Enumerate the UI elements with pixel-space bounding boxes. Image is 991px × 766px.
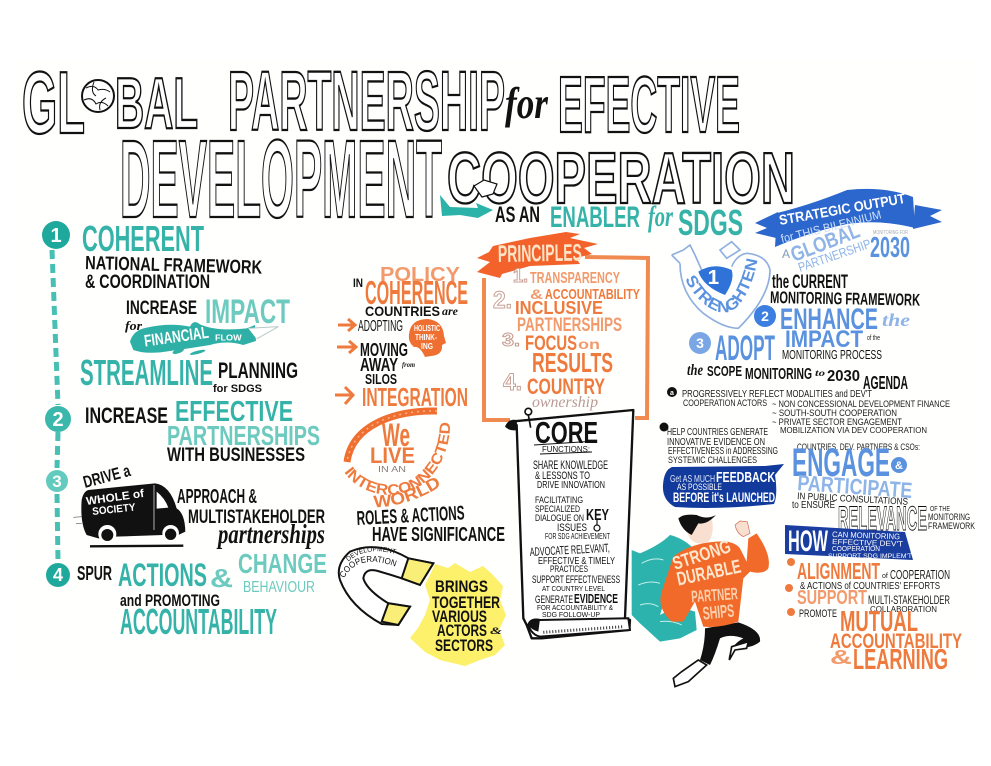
panel: core functions scroll	[505, 408, 633, 638]
icon: head, holistic thinking: THINK-	[415, 333, 437, 342]
how bullets	[785, 558, 962, 676]
speech bubble: feedback: BEFORE it's LAUNCHED	[673, 489, 775, 505]
timeline: numbered dashed line: 2	[52, 409, 64, 431]
principle 1: TRANSPARENCY	[530, 270, 620, 287]
bullet b: help countries: EFFECTIVENESS in ADDRESSING	[668, 446, 778, 457]
step 4: spur actions	[77, 548, 327, 642]
point 3: adopt the scope: 2030	[827, 368, 860, 385]
function 2: facilitating dialogue: FACILITATING	[535, 495, 583, 506]
step 4: spur actions: &	[210, 563, 233, 593]
principle 4: ownership	[532, 394, 598, 411]
how box	[785, 525, 913, 560]
we live in an interconnected world: IN AN	[378, 465, 406, 474]
point 2: enhance the impact: ENHANCE	[780, 303, 878, 336]
subtitle: as an enabler for SDGs: SDGS	[678, 202, 743, 243]
function 2: facilitating dialogue	[535, 495, 610, 541]
how bullets: PROMOTE	[799, 608, 837, 620]
icon: key	[594, 520, 600, 531]
point 3: adopt the scope: 3	[696, 335, 704, 351]
how bullets: of	[882, 573, 888, 580]
timeline: numbered dashed line: 1	[50, 225, 62, 247]
panel: core functions scroll: FUNCTIONS:	[542, 445, 590, 454]
bullet a: progressively reflect modalities: ~ NON CONCESSIONAL DEVELOPMENT FINANCE	[772, 399, 950, 409]
step 3: whole of society van: MULTISTAKEHOLDER	[188, 507, 325, 528]
engage and participate: ENGAGE	[792, 441, 890, 485]
how box: COOPERATION	[832, 544, 880, 553]
function 4: support effectiveness	[532, 574, 620, 593]
principle 2	[493, 287, 622, 336]
panel: middle column, policy coherence: POLICY	[380, 264, 461, 286]
step 1: coherent national framework: & COORDINATION	[85, 272, 210, 293]
legs	[700, 622, 760, 665]
principle 1: ACCOUNTABILITY	[545, 286, 640, 303]
function 1: share knowledge: SHARE KNOWLEDGE	[533, 458, 608, 472]
icon: van: WHOLE of	[85, 488, 145, 508]
arrow	[338, 319, 355, 331]
icon: magnet: COOPERATION	[340, 556, 397, 577]
panel: left column, four steps	[42, 218, 327, 642]
subtitle: as an enabler for SDGs: for	[648, 200, 673, 233]
function 3: advocate: PRACTICES	[550, 564, 588, 575]
step 1: coherent national framework: for	[125, 318, 143, 333]
panel: middle column, policy coherence: are	[442, 304, 459, 318]
how bullets: &	[830, 647, 852, 669]
step 2: effective partnerships: PARTNERSHIPS	[167, 420, 320, 451]
step 3: whole of society van	[73, 461, 325, 549]
function 5: generate evidence: FOR ACCOUNTABILITY &	[537, 605, 613, 612]
function 1: share knowledge: DRIVE INNOVATION	[537, 480, 605, 491]
function 3: advocate: EFFECTIVE & TIMELY	[538, 556, 615, 567]
step 2: effective partnerships	[85, 396, 320, 466]
panel: core functions scroll: CORE	[535, 415, 598, 450]
how bullets: & ACTIONS of COUNTRIES' EFFORTS	[800, 580, 940, 592]
function 5: generate evidence: EVIDENCE	[574, 591, 618, 606]
panel: middle column, policy coherence: ADOPTING	[358, 318, 403, 335]
icon: magnet	[338, 546, 435, 626]
panel: middle column, policy coherence: HAVE SIGNIFICANCE	[372, 524, 505, 546]
icon: handshake	[474, 180, 497, 197]
engage and participate: COUNTRIES, DEV. PARTNERS & CSOs:	[797, 442, 920, 452]
bullet a: progressively reflect modalities: a	[670, 390, 674, 397]
icon: magnet: DEVELOPMENT	[346, 546, 396, 562]
point 3: adopt the scope: the	[687, 362, 703, 379]
step 2: effective partnerships: INCREASE	[85, 403, 168, 428]
icon: heart with hands, strengthen: 1	[708, 266, 719, 289]
timeline: numbered dashed line	[42, 221, 71, 587]
speech bubble: feedback	[663, 464, 784, 508]
bullet a: progressively reflect modalities: COOPERATION ACTORS	[683, 398, 767, 408]
icon: head, holistic thinking	[409, 319, 446, 357]
subtitle: as an enabler for SDGs: AS AN	[495, 202, 540, 227]
panel: middle column, policy coherence: COUNTRIES	[365, 303, 440, 319]
function 3: advocate	[529, 541, 615, 575]
title: for	[505, 79, 549, 128]
principle 3: RESULTS	[532, 347, 613, 378]
subtitle: as an enabler for SDGs: ENABLER	[550, 201, 640, 234]
icon: heart with hands, strengthen: STRENGHTEN	[686, 258, 758, 312]
step 1: coherent national framework: PLANNING	[218, 358, 298, 383]
point 2: enhance the impact: MONITORING PROCESS	[782, 347, 882, 362]
panel: middle column, policy coherence: from	[402, 361, 416, 369]
point 3: adopt the scope: to	[815, 368, 826, 378]
banner: strategic output	[755, 189, 942, 247]
financial flow brush stroke	[130, 322, 278, 356]
principle 4	[503, 369, 605, 411]
function 5: generate evidence: GENERATE	[535, 594, 573, 606]
sweater lettering: DURABLE	[675, 556, 743, 591]
function 2: facilitating dialogue: DIALOGUE ON	[535, 513, 584, 524]
we live in an interconnected world: WORLD	[373, 478, 439, 508]
function 2: facilitating dialogue: ISSUES	[557, 522, 587, 534]
step 4: spur actions: CHANGE	[238, 548, 327, 579]
point 3: adopt the scope	[687, 329, 908, 393]
engage and participate: IN PUBLIC CONSULTATIONS	[797, 491, 908, 508]
function 2: facilitating dialogue: FOR SDG ACHIEVEMENT	[545, 532, 610, 541]
heading: a global partnership 2030: A	[782, 247, 790, 261]
point 3: adopt the scope: SCOPE	[707, 363, 742, 380]
engage and participate	[792, 441, 975, 538]
function 1: share knowledge	[533, 458, 608, 491]
point 2: enhance the impact: of the	[867, 335, 880, 342]
function 5: generate evidence: SDG FOLLOW-UP	[542, 612, 600, 619]
callout: brings together various actors and sectors: &	[490, 626, 502, 636]
step 4: spur actions: and PROMOTING	[120, 591, 220, 610]
subtitle: as an enabler for SDGs	[440, 195, 743, 243]
bullet b: help countries: HELP COUNTRIES GENERATE	[667, 427, 768, 438]
step 1: coherent national framework: for SDGS	[213, 383, 262, 395]
function 4: support effectiveness: SUPPORT EFFECTIVENESS	[532, 574, 620, 586]
step 4: spur actions: ACCOUNTABILITY	[120, 601, 277, 642]
icon: globe	[82, 80, 114, 112]
sweater lettering: SHIPS	[702, 600, 735, 624]
bullet a: progressively reflect modalities: ~ PRIVATE SECTOR ENGAGEMENT	[772, 417, 902, 427]
cape	[632, 535, 697, 642]
principle 3: FOCUS	[525, 332, 577, 355]
sweater lettering: STRONG	[670, 535, 733, 574]
speech bubble: feedback: AS POSSIBLE	[677, 482, 722, 492]
icon: head, holistic thinking: ING	[421, 342, 433, 351]
principle 2: 2.	[493, 287, 512, 314]
point 3: adopt the scope: ADOPT	[715, 329, 775, 368]
timeline: numbered dashed line: 3	[52, 472, 62, 491]
step 1: coherent national framework: NATIONAL FRAMEWORK	[85, 253, 263, 279]
sweater	[660, 533, 769, 627]
bullet a: progressively reflect modalities	[667, 387, 950, 435]
function 1: share knowledge: & LESSONS TO	[535, 470, 590, 482]
title: GL	[22, 53, 85, 152]
panel: middle column, policy coherence: COHERENCE	[365, 274, 468, 311]
step 3: whole of society van: APPROACH &	[177, 486, 257, 508]
principle 3	[502, 330, 613, 378]
engage and participate: to ENSURE	[792, 500, 835, 511]
we live in an interconnected world: INTERCONNECTED	[344, 422, 450, 495]
callout: brings together various actors and sectors: SECTORS	[435, 636, 493, 655]
step 4: spur actions: BEHAVIOUR	[243, 579, 315, 596]
panel: middle column, policy coherence: SILOS	[365, 371, 397, 388]
bullet a: progressively reflect modalities: ~ SOUTH-SOUTH COOPERATION	[772, 408, 897, 418]
heading: a global partnership 2030: MONITORING FOR	[873, 230, 908, 236]
speech bubble: feedback: FEEDBACK	[716, 469, 775, 486]
step 3: whole of society van: partnerships	[216, 519, 325, 549]
timeline: numbered dashed line: 4	[53, 565, 63, 585]
title: BAL	[115, 64, 198, 144]
bullet b: help countries	[660, 422, 778, 466]
title: COOPERATION	[447, 139, 795, 219]
we live in an interconnected world: We	[382, 417, 410, 453]
function 2: facilitating dialogue: KEY	[586, 507, 609, 524]
how bullets: COLLABORATION	[870, 605, 937, 614]
heading: a global partnership 2030: PARTNERSHIP	[796, 236, 873, 275]
how bullets: COOPERATION	[890, 567, 950, 582]
panel: middle column, policy coherence: IN	[353, 276, 363, 290]
panel: middle column, policy coherence: ROLES & ACTIONS	[356, 502, 465, 530]
point 2: enhance the impact: the	[882, 310, 910, 330]
point 3: adopt the scope: MONITORING	[745, 366, 812, 383]
speech bubble: feedback: Get AS MUCH	[670, 474, 715, 485]
how box: SUPPORT SDG IMPLEM'T	[828, 553, 912, 560]
how bullets: SUPPORT	[797, 587, 867, 609]
financial flow brush stroke: FLOW	[215, 332, 243, 342]
function 4: support effectiveness: AT COUNTRY LEVEL	[542, 584, 605, 593]
step 4: spur actions: SPUR	[77, 563, 112, 585]
principle 3: on	[578, 336, 600, 352]
principle 4: COUNTRY	[527, 374, 605, 399]
heading: a global partnership 2030	[782, 219, 910, 275]
function 5: generate evidence	[535, 591, 618, 619]
sweater lettering: PARTNER	[691, 584, 738, 606]
banner: strategic output: STRATEGIC OUTPUT	[778, 190, 907, 228]
panel: middle column, policy coherence	[335, 264, 506, 666]
heading: a global partnership 2030: 2030	[870, 232, 910, 264]
step 2: effective partnerships: WITH BUSINESSES	[167, 445, 305, 466]
point 2: enhance the impact: IMPACT	[785, 326, 863, 353]
panel: middle column, policy coherence: MOVING	[360, 340, 408, 360]
icon: van: SOCIETY	[92, 502, 136, 518]
heading: a global partnership 2030: GLOBAL	[788, 219, 863, 267]
step 2: effective partnerships: EFFECTIVE	[175, 396, 293, 428]
callout: brings together various actors and sectors: TOGETHER	[432, 593, 500, 612]
engage and participate: FRAMEWORK	[928, 521, 975, 531]
principle 1	[513, 266, 640, 303]
callout: brings together various actors and sectors: BRINGS	[435, 577, 488, 596]
icon: heart with hands, strengthen	[671, 240, 771, 330]
icon: van	[73, 483, 185, 546]
step 1: coherent national framework: STREAMLINE	[80, 352, 213, 393]
banner heading	[477, 232, 598, 278]
function 3: advocate: ADVOCATE RELEVANT,	[529, 541, 610, 559]
banner heading: PRINCIPLES	[498, 240, 582, 268]
principle 3: 3.	[502, 330, 520, 350]
title: EFECTIVE	[558, 60, 740, 149]
principle 1: &	[530, 286, 543, 302]
panel: middle column, policy coherence: INTEGRATION	[362, 382, 468, 412]
bullet b: help countries: SYSTEMIC CHALLENGES	[668, 455, 757, 466]
step 1: coherent national framework: COHERENT	[82, 218, 204, 259]
engage and participate: MONITORING	[928, 512, 970, 522]
illustration: superhero, strong durable partnerships	[632, 515, 769, 687]
step 1: coherent national framework	[80, 218, 298, 395]
scroll	[505, 408, 633, 638]
step 4: spur actions: ACTIONS	[118, 557, 207, 593]
point 3: adopt the scope: AGENDA	[863, 373, 908, 393]
sweater lettering	[670, 535, 743, 624]
step 1: coherent national framework: IMPACT	[205, 293, 290, 331]
title: DEVELOPMENT	[120, 118, 442, 241]
title: PARTNERSHIP	[228, 54, 505, 148]
how box: EFFECTIVE DEV'T	[832, 537, 904, 548]
bullet b: help countries: INNOVATIVE EVIDENCE ON	[667, 437, 765, 448]
callout: brings together various actors and sectors: ACTORS	[437, 621, 487, 640]
title	[22, 53, 795, 241]
principle 2: INCLUSIVE	[515, 298, 603, 318]
bullet a: progressively reflect modalities: MOBILIZATION VIA DEV COOPERATION	[780, 425, 927, 435]
boots	[673, 642, 748, 687]
engage and participate: &	[895, 460, 903, 472]
we live in an interconnected world: LIVE	[370, 443, 415, 468]
point 2: enhance the impact	[754, 303, 910, 362]
how bullets: ALIGNMENT	[797, 558, 880, 584]
engage and participate: PARTICIPATE	[797, 470, 913, 503]
panel: middle column, policy coherence: AWAY	[360, 355, 398, 375]
how box: CAN MONITORING	[832, 530, 900, 541]
how box: HOW	[788, 525, 828, 558]
step 3: whole of society van: DRIVE a	[81, 461, 133, 492]
arrow	[337, 341, 356, 353]
head and hair	[678, 515, 716, 544]
panel: strategic output: the CURRENT	[772, 272, 848, 293]
principle 4: 4.	[503, 369, 522, 396]
arrow	[440, 195, 493, 218]
banner: strategic output: for THIS BILENNIUM	[779, 207, 883, 246]
engage and participate: OF THE	[930, 506, 950, 513]
how bullets: MUTUAL	[840, 606, 918, 638]
panel: principles	[477, 232, 648, 420]
function 2: facilitating dialogue: SPECIALIZED	[535, 504, 580, 515]
icon: head, holistic thinking: HOLISTIC	[414, 324, 440, 333]
hand	[735, 521, 750, 537]
bullet a: progressively reflect modalities: PROGRESSIVELY REFLECT MODALITIES and DEV'T	[682, 389, 872, 400]
financial flow brush stroke: FINANCIAL	[143, 323, 210, 351]
callout: brings together various actors and sectors	[410, 563, 506, 666]
point 2: enhance the impact: 2	[761, 308, 769, 324]
panel: strategic output	[660, 188, 975, 676]
principle 1: 1.	[513, 266, 528, 287]
step 1: coherent national framework: INCREASE	[126, 298, 197, 319]
how bullets: MULTI-STAKEHOLDER	[868, 595, 950, 607]
principle 2: PARTNERSHIPS	[517, 315, 622, 336]
arrow	[335, 387, 353, 404]
callout: brings together various actors and sectors: VARIOUS	[432, 607, 487, 626]
